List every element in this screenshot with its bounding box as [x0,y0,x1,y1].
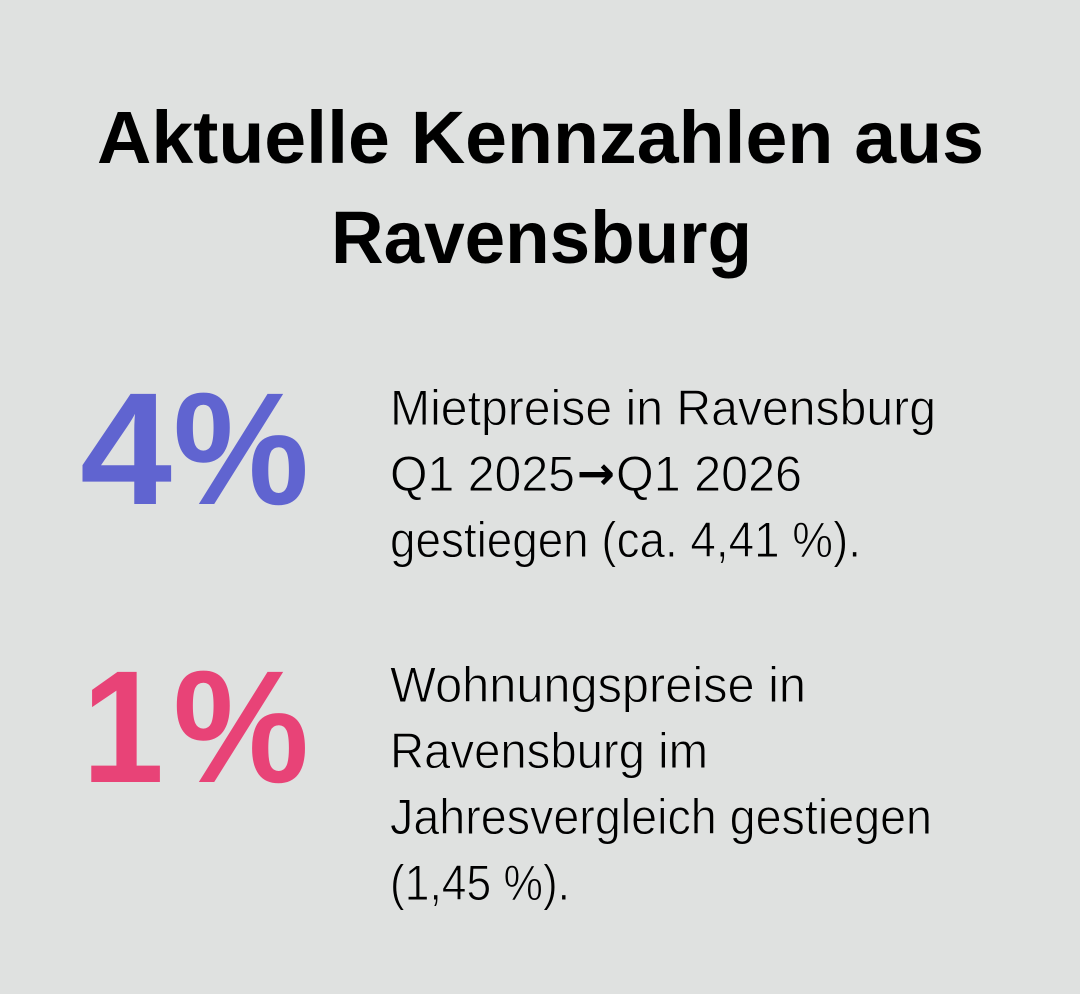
big number: 1% [82,637,309,816]
text block: rent description: Q1 2026 [616,446,802,502]
big number: 1%: 1 [82,637,164,816]
text block: rent description: gestiegen (ca. 4,41 %). [390,512,861,568]
big number: 4%: 4 [80,359,172,538]
text block: apartment price description [390,657,932,911]
text block: apartment price description: Ravensburg im [390,723,708,779]
text block: rent description: Mietpreise in Ravensburg [390,380,936,436]
panel: apartment price statistic [82,637,932,911]
big number: 1%: % [173,637,309,816]
title: Ravensburg [331,196,752,279]
panel: rent statistic [80,359,936,568]
text block: apartment price description: Wohnungspreise in [390,657,806,713]
icon: arrow: → [577,446,615,500]
big number: 4%: % [173,359,309,538]
title [97,96,984,279]
text block: apartment price description: (1,45 %). [390,855,570,911]
text block: apartment price description: Jahresvergleich gestiegen [390,789,932,845]
big number: 4% [80,359,309,538]
text block: rent description [390,380,936,568]
title: Aktuelle Kennzahlen aus [97,96,984,179]
text block: rent description: Q1 2025 [390,446,575,502]
